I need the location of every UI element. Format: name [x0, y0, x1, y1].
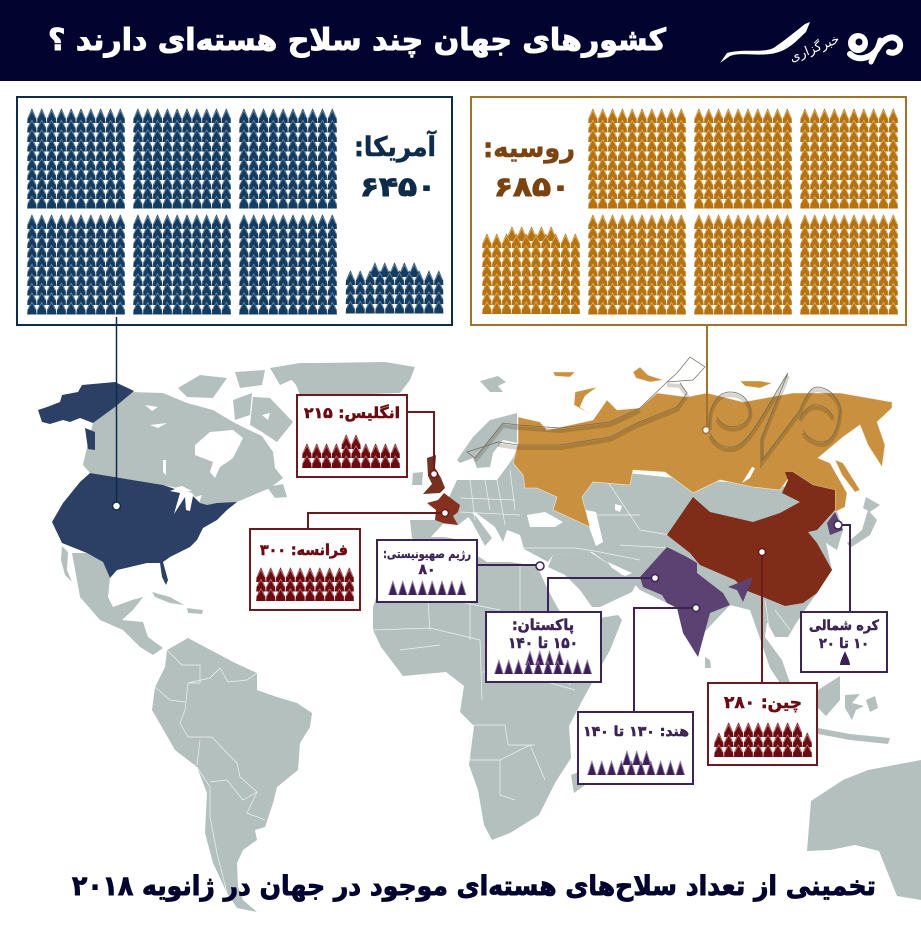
- watermark: news agency logo over the map: [467, 357, 840, 463]
- callout: North Korea: [801, 612, 887, 672]
- map: China: [667, 472, 835, 606]
- India warheads: [587, 750, 685, 775]
- callout: India: هند: ۱۳۰ تا ۱۴۰: [583, 724, 689, 740]
- callout: China: [708, 683, 817, 765]
- callout: UK: انگلیس: ۲۱۵: [304, 404, 400, 422]
- leader: China: [758, 548, 766, 683]
- callout: Pakistan: ۱۵۰ تا ۱۴۰: [508, 634, 578, 652]
- callout: China: چین: ۲۸۰: [724, 693, 802, 713]
- footer caption: تخمینی از تعداد سلاح‌های هسته‌ای موجود در جهان در ژانویه ۲۰۱۸: [72, 871, 876, 902]
- leader: UK: [407, 412, 438, 478]
- map: France: [427, 493, 460, 525]
- France warheads: [256, 567, 354, 601]
- Russia warhead grid: [482, 108, 898, 314]
- callout: UK: [297, 395, 407, 477]
- leader: France: [308, 510, 448, 529]
- leader: Pakistan: [548, 574, 658, 612]
- logo caption: خبرگزاری: [787, 31, 842, 66]
- map: Alaska and USA: [38, 382, 237, 585]
- map: North Korea: [827, 512, 843, 535]
- callout: North Korea: ۱۰ تا ۲۰: [819, 636, 869, 652]
- UK warheads: [302, 434, 400, 468]
- leader: North Korea: [834, 521, 850, 612]
- America count: ۶۴۵۰: [360, 172, 436, 203]
- logo icon: [848, 33, 900, 62]
- Russia label: روسیه:: [483, 133, 575, 164]
- leader: Israel: [477, 562, 544, 570]
- callout: Israel: ۸۰: [418, 562, 436, 578]
- map: Lake Baikal: [742, 467, 755, 483]
- panel: Russia: [471, 97, 906, 325]
- callout: Pakistan: پاکستان:: [512, 616, 574, 635]
- title: کشورهای جهان چند سلاح هسته‌ای دارند ؟: [48, 23, 667, 58]
- Pakistan warheads: [494, 650, 592, 674]
- map: grey land masses: [61, 362, 921, 912]
- header band: [0, 0, 921, 81]
- callout: North Korea: کره شمالی: [809, 618, 880, 634]
- callout: Pakistan: [486, 612, 601, 682]
- callout: France: فرانسه: ۳۰۰: [260, 541, 348, 559]
- logo wordmark: [720, 22, 810, 63]
- map: country borders: [155, 470, 790, 893]
- leader: America: [112, 317, 120, 510]
- callout: Israel: رژیم صهیونیستی:: [383, 547, 471, 562]
- callout: India: [578, 712, 693, 784]
- world map: [38, 362, 921, 912]
- America label: آمریکا:: [354, 130, 437, 163]
- leader: India: [634, 604, 700, 712]
- Israel warheads: [388, 580, 467, 595]
- panel: America: [17, 97, 452, 325]
- America warhead grid: [27, 108, 444, 314]
- map: United Kingdom: [423, 455, 445, 494]
- map: inland seas: [145, 405, 632, 576]
- map: Russia: [513, 367, 892, 527]
- Russia count: ۶۸۵۰: [494, 172, 570, 203]
- North Korea warhead: [840, 651, 850, 665]
- China warheads: [714, 722, 812, 757]
- callout: France: [250, 529, 360, 610]
- logo: Mehr news agency: [720, 22, 900, 66]
- leader: Russia: [702, 326, 710, 434]
- map: Pakistan and India: [640, 547, 753, 657]
- callout: Israel: [377, 540, 477, 602]
